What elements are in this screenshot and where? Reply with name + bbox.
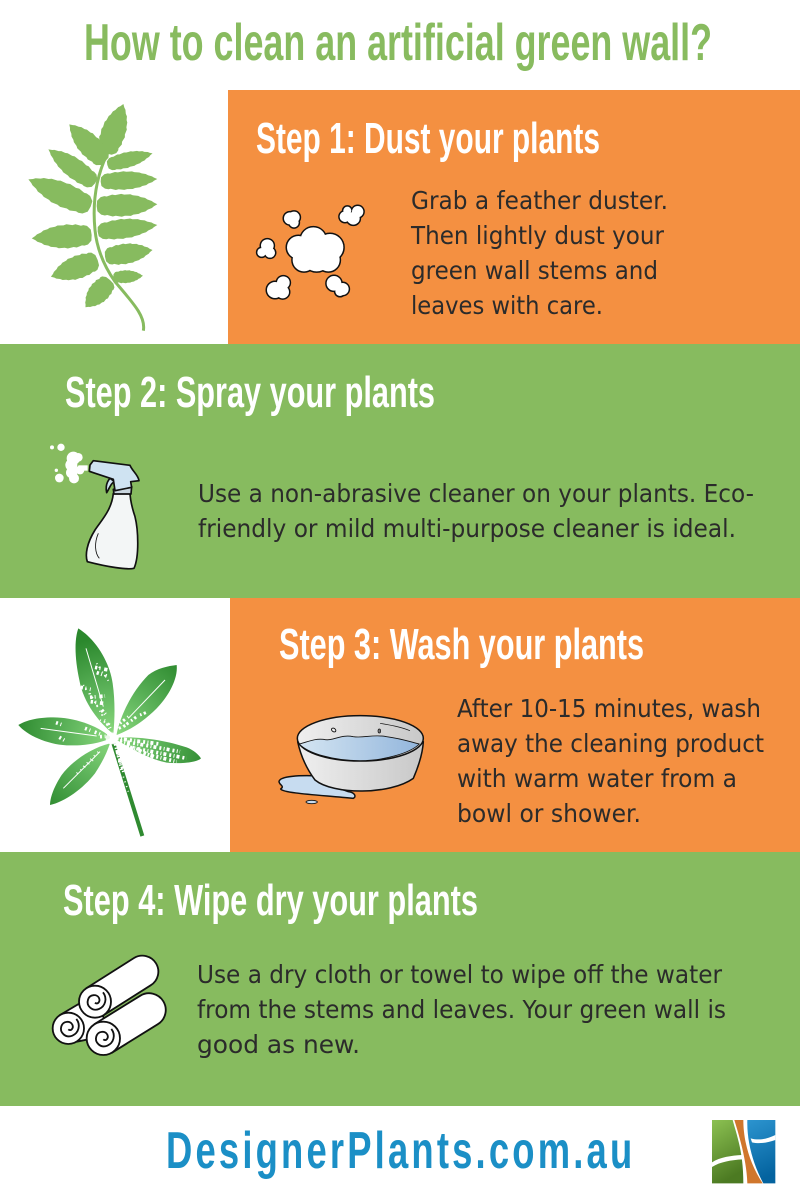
body text: step 3: away the cleaning product	[457, 729, 764, 758]
body text: step 4: Use a dry cloth or towel to wipe off the water	[197, 960, 723, 989]
body text: step 2	[198, 479, 754, 543]
heading: step 4: Step 4: Wipe dry your plants	[63, 876, 478, 925]
body text: step 3: with warm water from a	[457, 764, 737, 793]
heading: step 1: Step 1: Dust your plants	[256, 114, 600, 163]
body text: step 1	[410, 186, 668, 320]
heading: step 2: Step 2: Spray your plants	[65, 368, 435, 417]
footer website: DesignerPlants.com.au	[166, 1120, 632, 1180]
icon: logo	[712, 1120, 775, 1183]
panel: step 1 background	[228, 90, 800, 344]
heading: step 3: Step 3: Wash your plants	[279, 620, 644, 669]
body text: step 1: green wall stems and	[411, 256, 658, 285]
icon: spray bottle	[50, 444, 139, 569]
body text: step 3	[457, 694, 764, 828]
icon: dust clouds	[257, 206, 363, 298]
icon: bowl of water	[279, 716, 423, 804]
icon: distressed green leaf	[18, 628, 201, 836]
body text: step 1: leaves with care.	[411, 291, 603, 320]
body text: step 2: Use a non-abrasive cleaner on your plants. Eco-	[198, 479, 754, 508]
panel: step 2 background	[0, 344, 800, 598]
body text: step 1: Grab a feather duster.	[411, 186, 668, 215]
body text: step 4	[197, 960, 726, 1059]
panel: step 4 background	[0, 852, 800, 1106]
body text: step 2: friendly or mild multi-purpose cleaner is ideal.	[198, 514, 736, 543]
panel: step 3 background	[230, 598, 800, 852]
icon: rolled towels	[53, 956, 166, 1055]
body text: step 1: Then lightly dust your	[410, 221, 665, 250]
body text: step 3: After 10-15 minutes, wash	[457, 694, 761, 723]
body text: step 4: from the stems and leaves. Your green wall is	[197, 995, 726, 1024]
body text: step 4: good as new.	[197, 1030, 360, 1059]
body text: step 3: bowl or shower.	[457, 799, 641, 828]
icon: fern leaf	[23, 100, 158, 331]
